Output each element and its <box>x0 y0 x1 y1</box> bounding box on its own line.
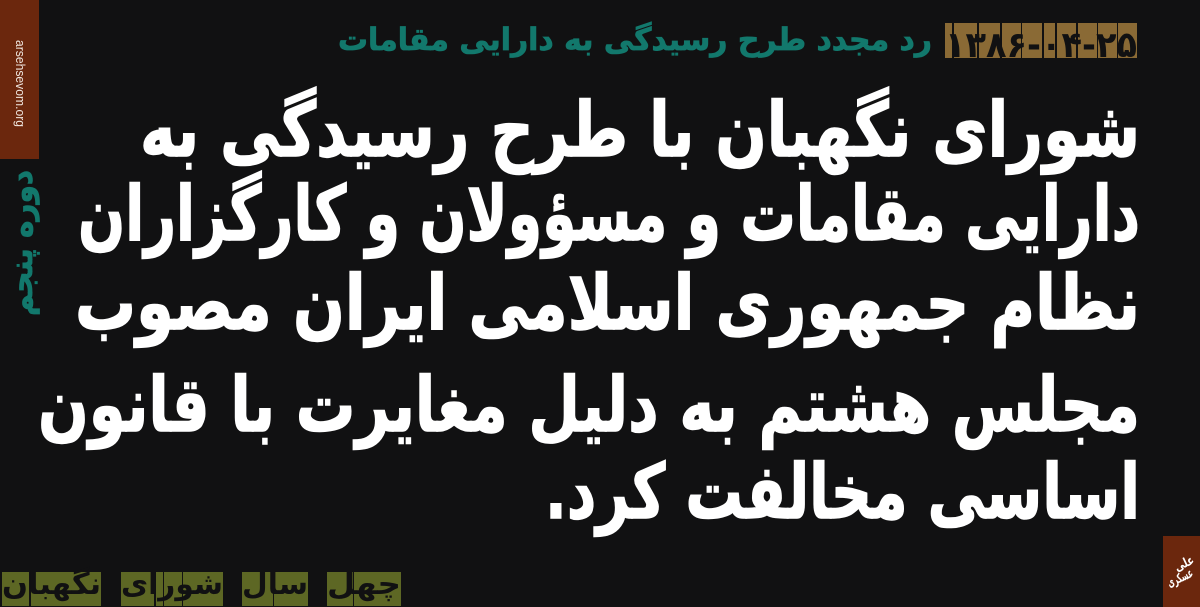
panel: logo tab <box>1163 536 1200 607</box>
website address: arsehsevom.org <box>13 40 28 127</box>
main statement text <box>38 85 1140 537</box>
series title: سال <box>242 567 308 602</box>
date: ۱۳۸۶-۰۴-۲۵ <box>945 25 1137 66</box>
series title tiles <box>2 566 401 606</box>
panel: side tab with website <box>0 0 39 159</box>
date stamp tiles <box>945 23 1137 66</box>
series title: چهل <box>327 567 401 602</box>
series title: نگهبان <box>2 566 101 602</box>
series title <box>2 566 401 602</box>
headline: subtitle: رد مجدد طرح رسیدگی به دارایی مقامات <box>338 21 932 58</box>
vertical heading: term label: دوره پنجم <box>4 170 40 316</box>
series title: شورای <box>121 567 223 602</box>
